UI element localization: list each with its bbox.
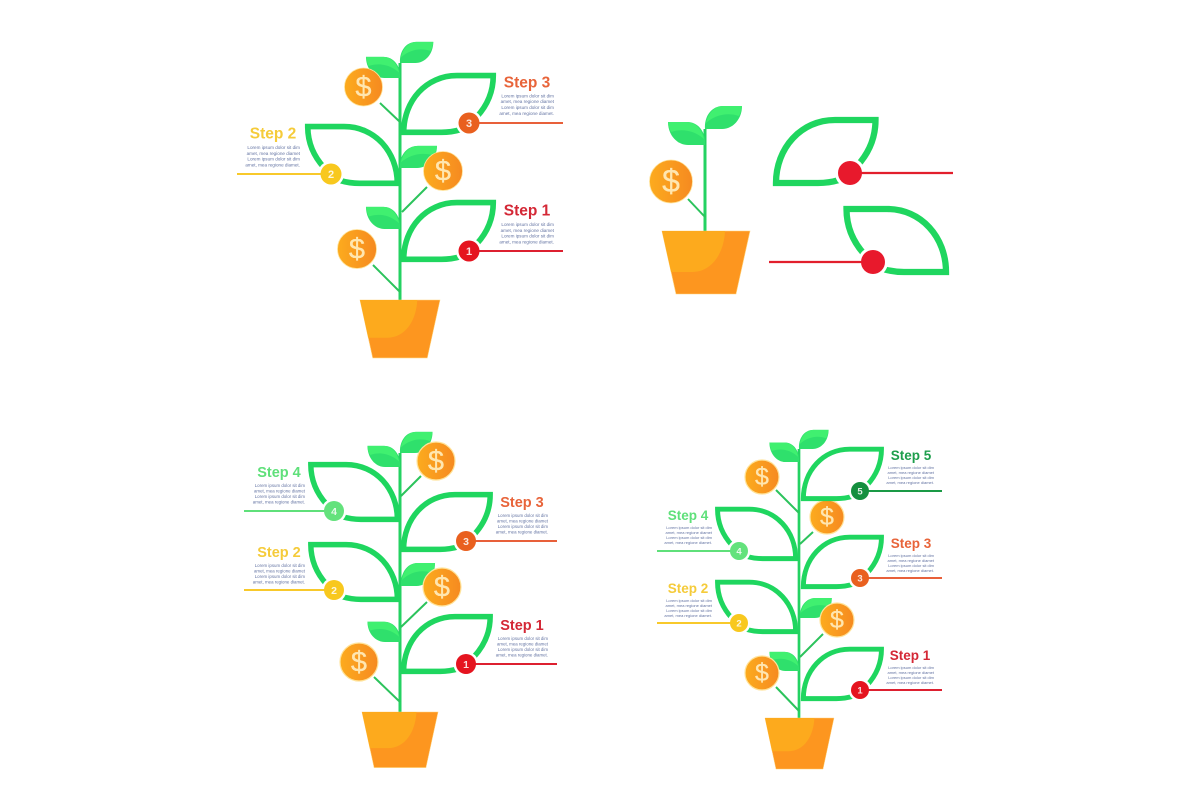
panel: three-step plant — [237, 42, 563, 358]
step 3 callout: Step 3 — [504, 74, 551, 92]
step 3 callout: 3 — [466, 118, 472, 130]
step 4 callout: Lorem ipsum dolor sit dim — [255, 483, 305, 488]
panel: five-step plant — [657, 430, 942, 769]
small leaf lower left — [367, 622, 400, 642]
coin 1: $ — [355, 72, 372, 104]
step 1 callout: Step 1 — [504, 202, 551, 220]
step 1 callout: amet, mea regione diamet. — [496, 652, 548, 658]
small leaf lower left — [366, 207, 400, 229]
small leaf left — [668, 122, 705, 145]
step 3 callout: 3 — [463, 536, 469, 548]
step 1 callout — [456, 202, 563, 264]
pot — [662, 231, 750, 294]
small leaf top left — [366, 57, 400, 78]
step 2 callout: Lorem ipsum dolor sit dim — [666, 608, 713, 613]
panel: seedling and leaf components — [650, 106, 953, 294]
step 1 callout: Lorem ipsum dolor sit dim — [498, 647, 548, 652]
leaf outline step 3 — [803, 537, 881, 587]
step 2 callout: amet, mea regione diamet. — [664, 613, 712, 618]
step 2 callout: amet, mea regione diamet. — [245, 162, 300, 168]
step 5 callout: amet, mea regione diamet — [888, 470, 935, 475]
step 1 callout: 1 — [857, 686, 863, 696]
step 1 callout: amet, mea regione diamet. — [886, 680, 934, 685]
leaf outline step 1 — [404, 617, 490, 671]
step 2 callout: amet, mea regione diamet — [254, 568, 306, 574]
stem — [798, 449, 800, 718]
coin 3 — [820, 603, 854, 637]
coin 1 — [417, 442, 455, 480]
step 1 callout: Lorem ipsum dolor sit dim — [501, 234, 554, 238]
coin — [650, 160, 692, 203]
step 2 callout: 2 — [331, 585, 337, 597]
step 3 callout: Lorem ipsum dolor sit dim — [888, 553, 935, 558]
step 1 callout: amet, mea regione diamet — [888, 670, 935, 675]
leaf outline step 3 — [404, 495, 490, 549]
step 2 callout: Lorem ipsum dolor sit dim — [247, 156, 300, 162]
branches — [776, 490, 823, 711]
small leaf middle right — [800, 598, 832, 618]
step 2 callout: amet, mea regione diamet — [666, 603, 713, 608]
branches — [373, 103, 427, 292]
step 4 callout: Lorem ipsum dolor sit dim — [255, 494, 305, 499]
left leaf connector — [769, 247, 888, 277]
step 3 callout: amet, mea regione diamet. — [496, 530, 548, 534]
leaf outline step 2 — [308, 127, 397, 183]
step 3 callout: Step 3 — [891, 536, 932, 551]
step 1 callout: Lorem ipsum dolor sit dim — [888, 675, 935, 680]
pot — [360, 300, 440, 358]
coin 4 — [745, 656, 779, 690]
leaf outline right — [776, 120, 876, 183]
stem — [398, 63, 402, 300]
branch — [688, 199, 705, 217]
step 5 callout: amet, mea regione diamet. — [886, 480, 934, 485]
coin 2 — [424, 152, 462, 190]
leaf outline step 3 — [404, 76, 493, 132]
leaf outline step 5 — [803, 449, 881, 499]
coin 3: $ — [349, 234, 365, 266]
coin 3 — [340, 643, 378, 681]
coin 3 — [338, 230, 376, 268]
stem — [704, 129, 706, 231]
step 4 callout: amet, mea regione diamet. — [253, 500, 305, 504]
pot — [765, 718, 834, 769]
small leaf right — [705, 106, 742, 129]
step 5 callout: Step 5 — [891, 448, 932, 463]
step 3 callout — [848, 536, 942, 590]
step 4 callout: Lorem ipsum dolor sit dim — [666, 535, 713, 540]
coin 2: $ — [434, 572, 450, 604]
panel: four-step plant — [244, 432, 557, 768]
coin 2: $ — [435, 156, 451, 188]
coin 2 — [423, 568, 461, 606]
step 1 callout: Step 1 — [500, 618, 544, 634]
step 1 callout: Step 1 — [890, 648, 931, 663]
step 4 callout: Step 4 — [668, 508, 709, 523]
step 1 callout — [848, 648, 942, 702]
pot — [362, 712, 438, 768]
coin 3: $ — [830, 606, 844, 634]
step 2 callout: Lorem ipsum dolor sit dim — [255, 563, 305, 568]
step 2 callout — [244, 545, 346, 602]
step 3 callout: 3 — [857, 574, 863, 584]
small leaf lower left — [769, 652, 799, 671]
step 3 callout: amet, mea regione diamet — [497, 518, 549, 524]
step 3 callout: Lorem ipsum dolor sit dim — [498, 513, 548, 518]
small leaf top left — [769, 442, 799, 462]
branches — [374, 476, 427, 702]
step 1 callout: 1 — [463, 659, 469, 671]
step 3 callout — [454, 495, 557, 554]
leaf outline step 4 — [311, 465, 397, 519]
leaf outline left — [846, 209, 946, 272]
step 1 callout: 1 — [466, 246, 472, 258]
step 5 callout: Lorem ipsum dolor sit dim — [888, 475, 935, 480]
small leaf middle right — [401, 563, 435, 586]
right leaf connector — [835, 158, 953, 188]
step 2 callout: Lorem ipsum dolor sit dim — [666, 598, 713, 603]
leaf outline step 1 — [404, 203, 493, 259]
coin 2: $ — [820, 503, 834, 531]
step 4 callout: 4 — [736, 546, 742, 558]
coin 1 — [344, 68, 382, 106]
step 4 callout: Step 4 — [257, 465, 301, 481]
step 4 callout — [657, 508, 750, 562]
step 1 callout — [454, 618, 557, 676]
step 1 callout: Lorem ipsum dolor sit dim — [888, 665, 935, 670]
step 2 callout: amet, mea regione diamet. — [253, 580, 305, 584]
step 3 callout: amet, mea regione diamet. — [886, 568, 934, 573]
leaf outline step 4 — [718, 509, 796, 559]
step 2 callout: Step 2 — [668, 581, 708, 596]
step 2 callout: amet, mea regione diamet — [247, 151, 301, 156]
step 1 callout: Lorem ipsum dolor sit dim — [501, 222, 554, 227]
step 5 callout: 5 — [857, 486, 863, 498]
small leaf middle right — [400, 146, 437, 168]
step 1 callout: amet, mea regione diamet — [501, 228, 555, 233]
coin 3: $ — [351, 646, 367, 678]
step 3 callout: Lorem ipsum dolor sit dim — [888, 563, 935, 568]
step 3 callout: Lorem ipsum dolor sit dim — [501, 94, 554, 98]
step 3 callout: Lorem ipsum dolor sit dim — [501, 105, 554, 110]
step 2 callout: Lorem ipsum dolor sit dim — [255, 574, 305, 579]
step 5 callout — [848, 448, 942, 502]
step 3 callout: amet, mea regione diamet — [888, 558, 935, 563]
step 3 callout: amet, mea regione diamet. — [499, 111, 554, 116]
coin 2 — [810, 500, 844, 534]
step 3 callout: Lorem ipsum dolor sit dim — [498, 524, 548, 529]
step 2 callout: Lorem ipsum dolor sit dim — [247, 145, 300, 150]
step 5 callout: Lorem ipsum dolor sit dim — [888, 465, 935, 470]
step 4 callout: amet, mea regione diamet — [254, 488, 306, 494]
coin 1: $ — [755, 463, 769, 491]
stem — [398, 453, 402, 712]
coin: $ — [662, 163, 680, 199]
step 1 callout: amet, mea regione diamet — [497, 642, 549, 646]
step 4 callout: amet, mea regione diamet. — [664, 540, 712, 545]
step 2 callout: Step 2 — [257, 545, 301, 561]
step 4 callout: Lorem ipsum dolor sit dim — [666, 525, 713, 530]
step 4 callout: 4 — [331, 506, 337, 518]
step 2 callout — [237, 126, 344, 187]
step 2 callout: Step 2 — [250, 126, 296, 142]
coin 1: $ — [428, 446, 444, 478]
step 3 callout: amet, mea regione diamet — [501, 99, 555, 104]
step 4 callout: amet, mea regione diamet — [666, 530, 713, 535]
step 2 callout: 2 — [736, 618, 742, 630]
step 3 callout: Step 3 — [500, 495, 544, 511]
small leaf top right — [400, 432, 433, 453]
leaf outline step 2 — [311, 545, 397, 599]
coin 4: $ — [755, 659, 769, 687]
step 3 callout — [456, 74, 563, 136]
step 2 callout: 2 — [328, 169, 334, 181]
small leaf top left — [367, 446, 400, 467]
leaf outline step 1 — [803, 649, 881, 699]
step 1 callout: Lorem ipsum dolor sit dim — [498, 636, 548, 641]
step 1 callout: amet, mea regione diamet. — [499, 240, 554, 244]
step 2 callout — [657, 581, 750, 634]
small leaf top right — [799, 430, 829, 449]
step 4 callout — [244, 465, 346, 524]
coin 1 — [745, 460, 779, 494]
leaf outline step 2 — [718, 582, 796, 632]
small leaf top right — [400, 42, 433, 63]
